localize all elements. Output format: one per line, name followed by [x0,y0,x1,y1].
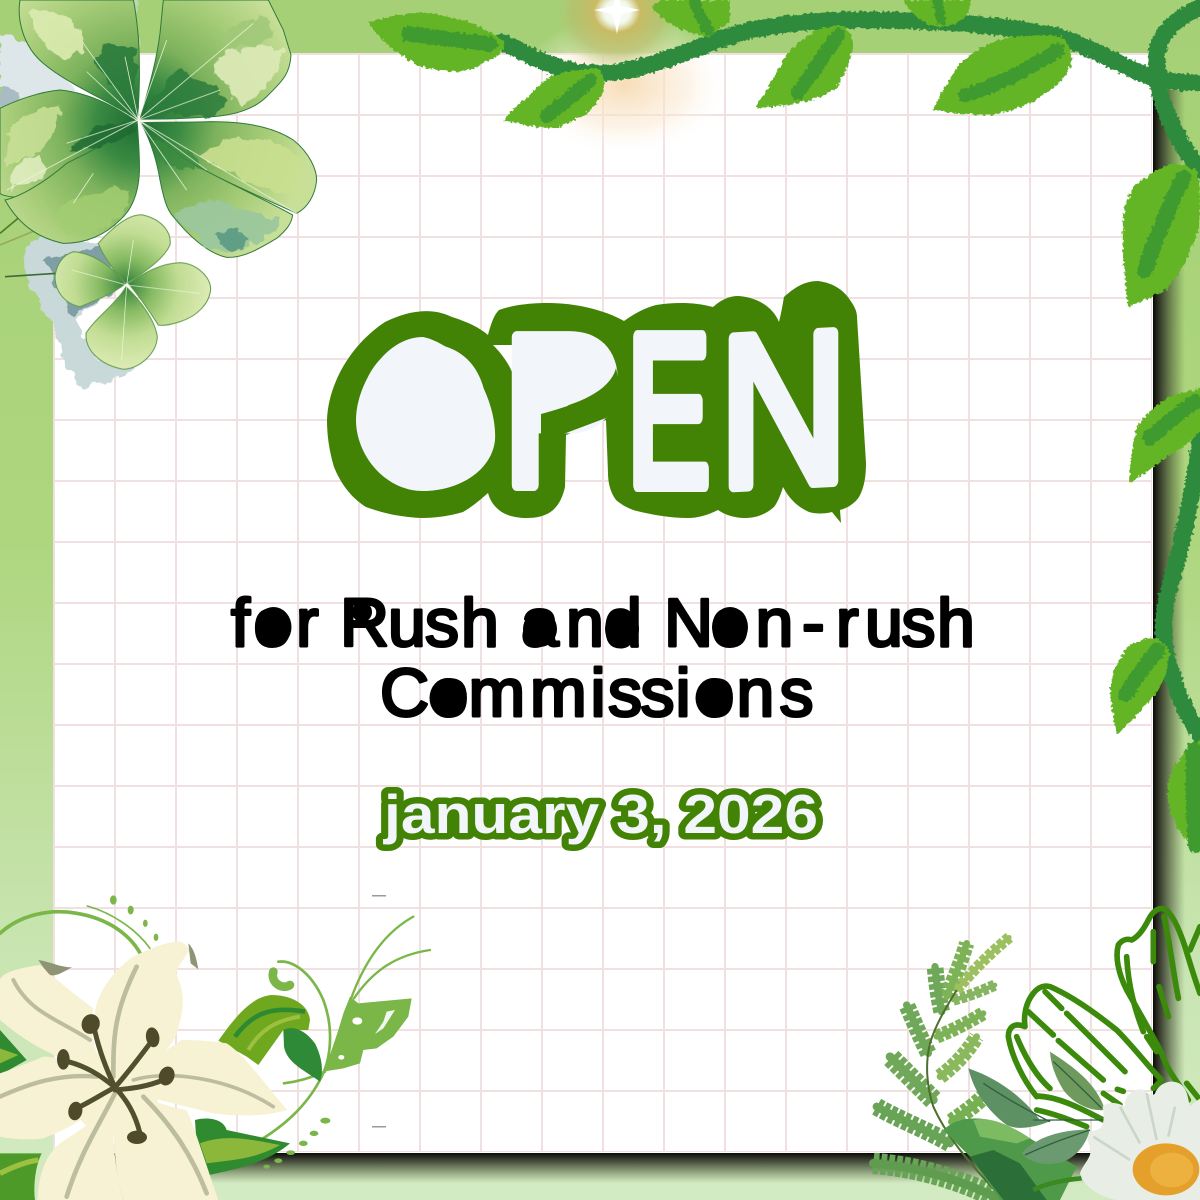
small clover veins [72,240,200,360]
watercolor wash behind clover [0,0,140,387]
letter N: N [719,286,848,533]
lily petals [0,942,287,1200]
clover colour blotches [7,10,304,252]
clover petals [0,0,317,257]
P bowl trim [541,368,623,440]
daisy petals [1080,1082,1200,1200]
dark lower leaves [943,1118,1082,1200]
fern frond leaflets [873,937,1013,1200]
small stray dashes [372,895,386,1128]
stems [0,217,57,277]
OPEN title sign [327,281,866,533]
white notch [493,345,516,372]
butterfly wings [323,997,412,1072]
striped and dark leaves [218,995,310,1065]
fern stem [927,990,1003,1200]
sprig dots [110,895,330,1169]
vine stems [502,7,1200,735]
lily stamens [68,1032,163,1133]
letter E: E [627,292,710,531]
veined watercolor leaves [968,1052,1107,1164]
title backing outline [327,281,866,523]
fern frond cores [873,937,1013,1200]
sprigs and butterfly [0,906,430,1143]
daisy centre [1133,1143,1199,1195]
icon: white lily with green sprigs and butterfly [0,895,430,1200]
date text: january 3, 2026 [383,783,818,845]
P bowl fill [520,332,616,416]
lily petal tips [38,943,198,975]
sun glare [520,0,730,157]
icon: ferns, outlined buds and daisy [873,908,1200,1200]
O bowl fill [356,337,495,491]
icon: large and small watercolor clovers [0,0,317,387]
letter P: P [502,291,622,532]
leaves [368,0,1200,855]
subtitle text [231,585,975,731]
vine with leaves: top and right [368,0,1200,855]
leaf midribs [408,0,1196,845]
outlined buds [1008,908,1200,1127]
lily anthers [57,1012,177,1144]
letter O: O [352,303,496,530]
subtitle line 1: for Rush and Non-rush [231,585,975,661]
small clover petals [55,215,211,369]
clover veins [7,23,297,213]
filled letter counters [256,602,748,718]
lily petal streaks [0,967,273,1197]
subtitle line 2: Commissions [380,655,814,731]
daisy petal shading [1093,1093,1175,1160]
